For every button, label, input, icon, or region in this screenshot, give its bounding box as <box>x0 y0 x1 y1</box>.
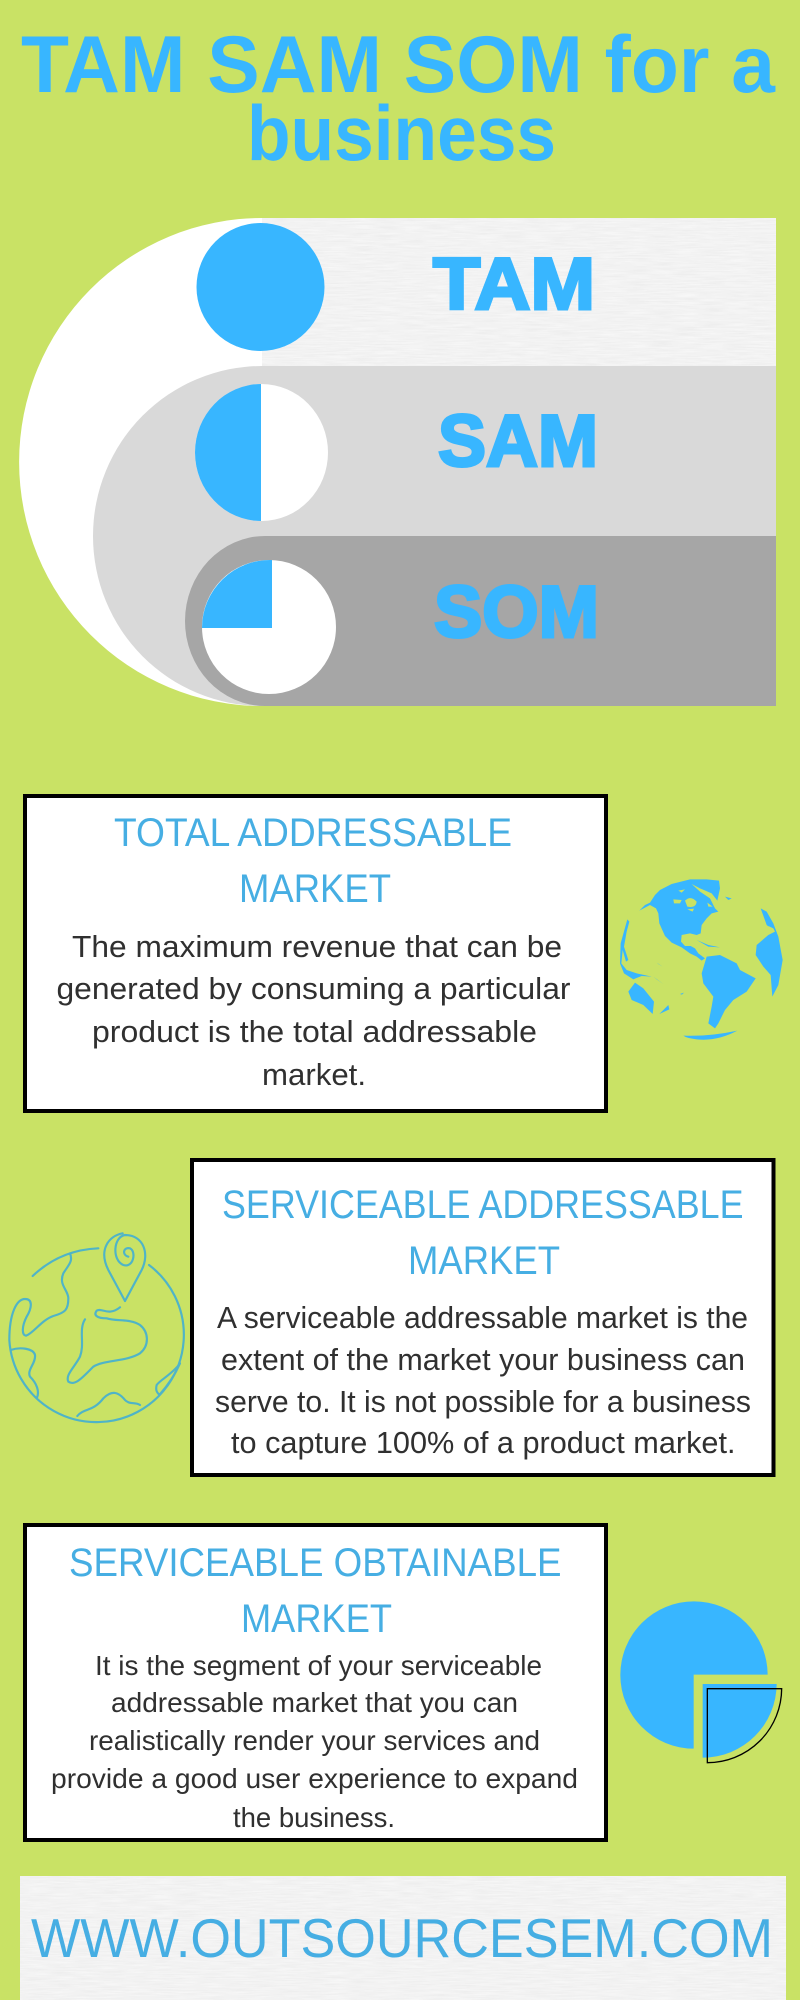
icon: filled globe <box>620 879 783 1040</box>
panel: serviceable obtainable market <box>25 1525 606 1840</box>
diagram: nested TAM SAM SOM bands <box>19 218 776 706</box>
panel: total addressable market: TOTAL ADDRESSABLE <box>114 811 512 855</box>
title: business <box>247 89 556 177</box>
panel: serviceable obtainable market: MARKET <box>241 1597 392 1641</box>
panel: serviceable addressable market: MARKET <box>408 1239 560 1283</box>
panel: serviceable obtainable market: It is the segment of your serviceable <box>95 1650 542 1681</box>
band: TAM: TAM <box>433 244 595 325</box>
title <box>21 20 776 177</box>
panel: total addressable market: MARKET <box>239 867 391 911</box>
panel: total addressable market <box>25 796 606 1111</box>
footer: website URL band: WWW.OUTSOURCESEM.COM <box>31 1907 773 1969</box>
panel: serviceable obtainable market: the business. <box>233 1802 395 1833</box>
panel: serviceable addressable market: SERVICEABLE ADDRESSABLE <box>222 1183 744 1227</box>
panel: serviceable obtainable market: SERVICEABLE OBTAINABLE <box>69 1541 562 1585</box>
footer: website URL band <box>20 1876 786 2000</box>
band: TAM <box>19 218 776 706</box>
panel: serviceable addressable market: extent of the market your business can <box>221 1342 745 1377</box>
band: SOM: SOM <box>434 572 599 653</box>
panel: total addressable market: generated by consuming a particular <box>56 971 570 1006</box>
icon: pie chart with separated quarter <box>620 1601 782 1763</box>
panel: total addressable market: market. <box>262 1057 366 1092</box>
panel: serviceable addressable market: serve to. It is not possible for a business <box>215 1384 751 1419</box>
panel: total addressable market: product is the total addressable <box>92 1014 537 1049</box>
title: TAM SAM SOM for a <box>21 20 776 110</box>
icon: outlined globe with map pin <box>9 1233 184 1422</box>
panel: serviceable addressable market: to capture 100% of a product market. <box>231 1425 736 1460</box>
panel: serviceable addressable market <box>192 1160 774 1475</box>
band: SAM <box>93 366 776 706</box>
panel: serviceable obtainable market: realistically render your services and <box>89 1725 540 1756</box>
band: SOM <box>185 536 776 706</box>
panel: serviceable obtainable market: addressable market that you can <box>111 1687 518 1718</box>
panel: serviceable addressable market: A serviceable addressable market is the <box>217 1300 748 1335</box>
band: SAM: SAM <box>438 401 598 482</box>
panel: serviceable obtainable market: provide a good user experience to expand <box>51 1763 578 1794</box>
panel: total addressable market: The maximum revenue that can be <box>72 929 562 964</box>
